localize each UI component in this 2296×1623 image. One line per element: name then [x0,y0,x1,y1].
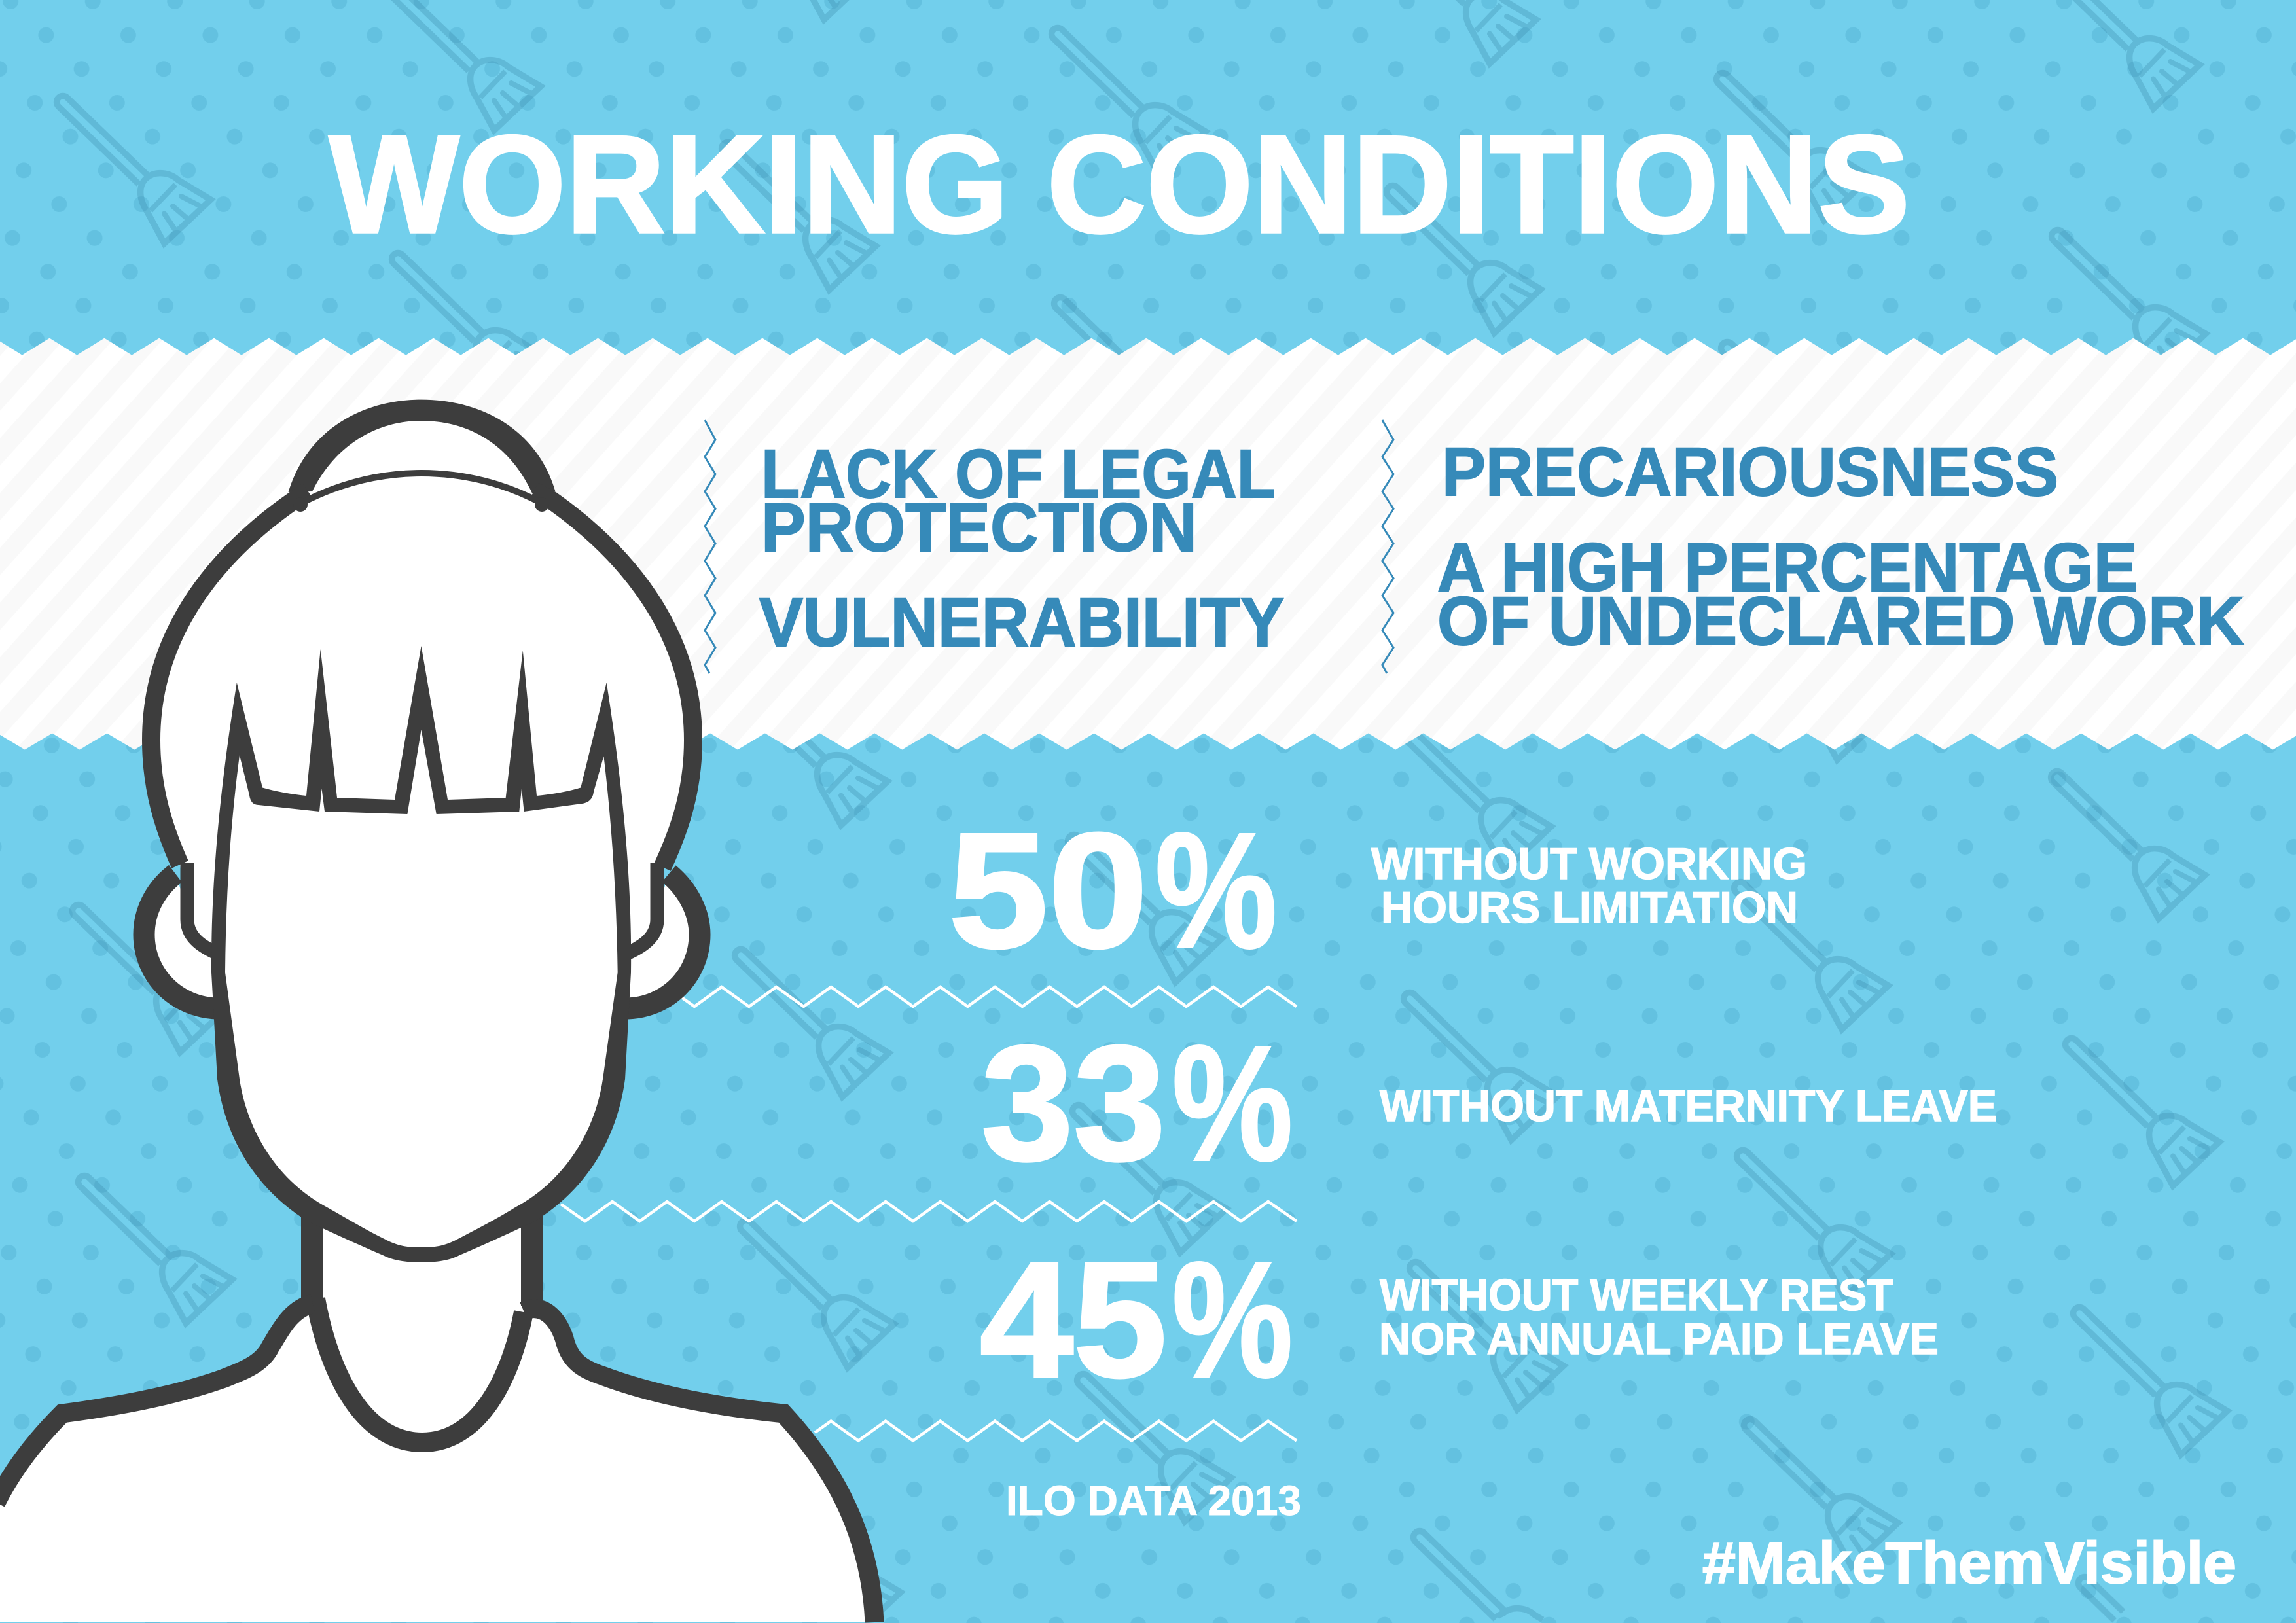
source note: ILO DATA 2013 [1006,1477,1301,1524]
left shoulder line [0,1304,313,1503]
stat label: 33%: WITHOUT MATERNITY LEAVE [1380,1081,1997,1131]
stat: 50% [948,799,1807,982]
neckline [315,1299,524,1442]
title: WORKING CONDITIONS [329,107,1910,262]
figure: faceless woman [0,400,874,1622]
stat: 50%: % [1155,799,1277,982]
text block: left column [759,436,1284,661]
stat: 45%: 45 [980,1228,1167,1411]
stat label: 45% [1379,1270,1939,1364]
text block: right column [1437,434,2244,660]
text block: right column: A HIGH PERCENTAGE [1437,529,2138,606]
stat: 50%: 50 [948,799,1148,982]
divider: white zigzag under 45% [815,1421,1297,1441]
hair band and knobs [293,473,549,512]
hashtag: #MakeThemVisible [1702,1531,2236,1596]
right ear infill [624,942,648,998]
left ear [144,874,219,1008]
divider: white zigzag under 33% [561,1202,1297,1221]
stat label: 50% [1371,839,1807,933]
face and fringe outline [211,646,631,1262]
left ear infill [196,942,219,998]
text block: right column: PRECARIOUSNESS [1442,434,2058,510]
neck [301,1204,543,1329]
panel: white zigzag band [0,338,2296,750]
body and shoulders [0,1304,874,1622]
divider: left vertical zigzag [705,420,715,673]
strands by the ears [187,863,657,954]
stat label: 45%: NOR ANNUAL PAID LEAVE [1379,1314,1939,1364]
stat: 33%: % [1172,1012,1293,1194]
stat label: 45%: WITHOUT WEEKLY REST [1380,1270,1893,1320]
text block: left column: LACK OF LEGAL [761,436,1276,512]
stat: 45% [980,1228,1939,1411]
text block: left column: PROTECTION [761,490,1197,566]
stat label: 50%: WITHOUT WORKING [1371,839,1807,889]
stat: 33%: 33 [981,1012,1166,1194]
hair outline [151,491,693,867]
stat: 33% [981,1012,1997,1194]
divider: right vertical zigzag [1382,420,1393,673]
hair fill [151,500,693,955]
hair bun [289,400,555,517]
face [225,730,618,1247]
right ear [625,874,700,1008]
stat: 45%: % [1172,1228,1293,1411]
divider: white zigzag under 50% [667,987,1297,1007]
text block: left column: VULNERABILITY [759,584,1284,661]
right shoulder line [524,1308,874,1622]
text block: right column: OF UNDECLARED WORK [1437,583,2244,660]
stat label: 50%: HOURS LIMITATION [1381,883,1798,933]
